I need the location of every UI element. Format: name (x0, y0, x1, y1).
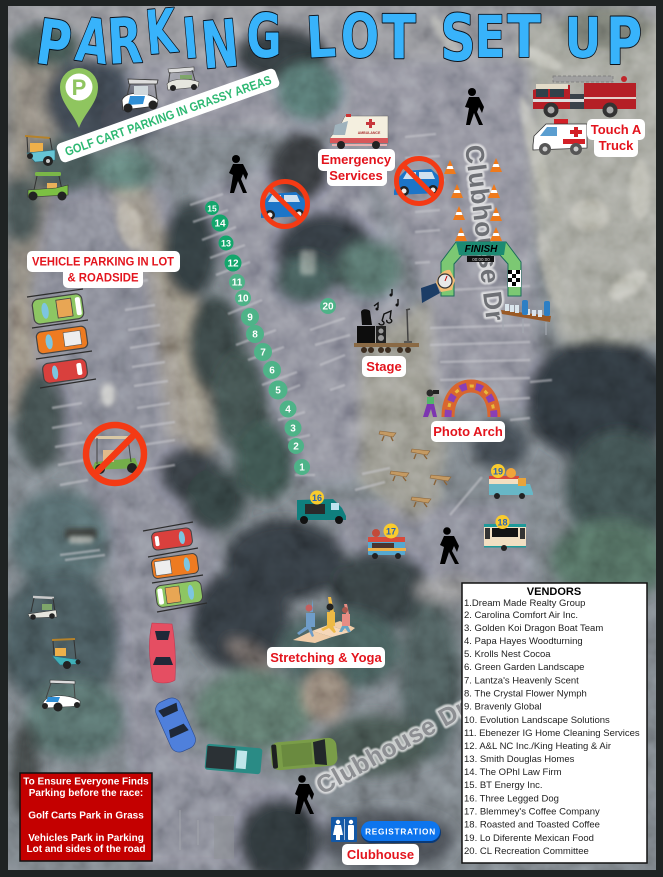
label: Vehicle Parking in lot and roadside (27, 251, 180, 288)
icon: golf cart lower two (52, 639, 80, 669)
road label: Clubhouse Dr curved: Clubhouse Dr (311, 694, 472, 800)
vendors rows: 2. Carolina Comfort Air Inc. (464, 610, 578, 621)
icon: white ambulance truck (533, 119, 587, 155)
icon: ambulance: AMBULANCE (358, 131, 381, 135)
vendors rows: 11. Ebenezer IG Home Cleaning Services (464, 728, 640, 739)
icon: photographer (423, 390, 439, 417)
green car (32, 293, 84, 325)
vendor number markers: 3 (290, 424, 296, 434)
traffic cones (444, 158, 502, 241)
vendor number markers: 1 (299, 462, 305, 474)
vendors rows: 20. CL Recreation Committee (464, 846, 589, 857)
vendors rows: 15. BT Energy Inc. (464, 780, 543, 791)
vendor number markers: 4 (285, 404, 291, 416)
icon: restrooms (331, 817, 357, 842)
label: Clubhouse (342, 844, 419, 865)
big van: green minivan (270, 737, 338, 771)
person two (327, 597, 335, 626)
label: Emergency Services (318, 149, 395, 186)
vendors rows: 18. Roasted and Toasted Coffee (464, 820, 600, 830)
lighter bush highlights (65, 12, 652, 543)
label: Stretching and Yoga: Stretching & Yoga (270, 650, 383, 665)
icon: parking pin: P (72, 75, 86, 100)
label: Clubhouse: Clubhouse (347, 847, 414, 862)
icon: golf cart lower three (42, 680, 80, 712)
food truck 18: 18 (497, 518, 508, 528)
icon: no cars sign one (261, 182, 308, 226)
button: registration: REGISTRATION (365, 828, 436, 836)
vendors rows: 1.Dream Made Realty Group (464, 598, 585, 609)
picnic tables (379, 431, 451, 507)
vendors rows: 8. The Crystal Flower Nymph (464, 688, 587, 700)
label: Touch A Truck (587, 119, 645, 157)
panel: parking notice: Parking before the race: (29, 788, 143, 799)
button: registration (361, 821, 441, 843)
title: P (32, 5, 76, 82)
title: G (246, 2, 282, 72)
label: Vehicle Parking in lot and roadside: & ROADSIDE (68, 270, 138, 284)
vendor number markers: 8 (252, 330, 258, 340)
vendors rows: 13. Smith Douglas Homes (464, 754, 575, 765)
vendors rows: 6. Green Garden Landscape (464, 662, 584, 673)
title: I (180, 5, 201, 72)
vendors rows: 16. Three Legged Dog (464, 794, 559, 804)
red car (42, 358, 88, 384)
orange car (151, 553, 199, 579)
title: L (305, 5, 338, 72)
title: P (606, 3, 642, 80)
vendors heading: VENDORS (527, 586, 581, 598)
icon: pedestrian top (465, 88, 484, 125)
icon: golf cart lower one (28, 597, 57, 620)
icon: parking pin (60, 68, 98, 128)
icon: white and green golf cart (167, 67, 199, 91)
vendors rows: 12. A&L NC Inc./King Heating & Air (464, 741, 611, 752)
icon: white golf cart (122, 79, 158, 112)
panel: parking notice: Vehicles Park in Parking (28, 833, 144, 844)
vendor number markers: 6 (269, 366, 275, 376)
panel: vendors list (462, 583, 647, 863)
title: O (341, 0, 379, 72)
icon: teal golf cart (25, 136, 55, 166)
vendor number markers: 10 (237, 294, 249, 304)
dark trees (9, 23, 81, 67)
vendors rows: 7. Lantza's Heavenly Scent (464, 676, 579, 686)
banner: golf cart parking in grassy areas: GOLF CART PARKING IN GRASSY AREAS (63, 73, 273, 159)
title: T (507, 2, 541, 71)
icon: no golf carts sign (86, 425, 144, 483)
vendor number markers: 15 (207, 204, 217, 214)
vendor number markers: 11 (232, 278, 243, 288)
finish arch: FINISH (465, 244, 498, 255)
vendor number markers: 5 (275, 386, 281, 396)
road label: Clubhouse Dr vertical: Clubhouse Dr (459, 143, 510, 323)
parked cars upper left (27, 289, 96, 388)
label: Stage: Stage (366, 359, 402, 374)
vendor number markers: 9 (247, 312, 253, 324)
vendor number markers: 12 (227, 258, 239, 270)
icon: hand with stopwatch (421, 270, 455, 303)
food truck 17: 17 (386, 526, 396, 536)
icon: pedestrian near food trucks (440, 527, 459, 564)
label: Vehicle Parking in lot and roadside: VEHICLE PARKING IN LOT (32, 254, 175, 268)
icon: pedestrian near lot (229, 155, 248, 193)
green car (155, 580, 203, 608)
vendor number markers: 14 (214, 218, 226, 230)
vendors rows: 4. Papa Hayes Woodturning (464, 636, 583, 647)
red car (151, 527, 193, 551)
music notes (374, 289, 398, 325)
panel: parking notice: Golf Carts Park in Grass (28, 810, 144, 822)
orange car (36, 326, 88, 354)
food truck 17 (368, 524, 406, 559)
vendors rows (464, 598, 640, 857)
title: U (565, 6, 601, 70)
icon: ambulance (330, 114, 388, 149)
label: Touch A Truck: Truck (599, 138, 634, 153)
finish arch: 00:00:00 (472, 257, 490, 262)
label: Stretching and Yoga (267, 647, 385, 668)
person three (342, 604, 350, 626)
title (32, 0, 642, 85)
finish arch (441, 242, 521, 296)
title: A (72, 5, 114, 79)
water table (501, 300, 551, 335)
vendor number markers: 7 (260, 348, 266, 358)
food truck 16: 16 (312, 493, 322, 503)
food truck 19: 19 (493, 466, 503, 476)
road label: Clubhouse Dr curved: Clubhouse Dr (311, 694, 472, 800)
big truck: teal pickup (204, 744, 263, 774)
hatched crosswalk (214, 828, 234, 854)
vendors rows: 3. Golden Koi Dragon Boat Team (464, 623, 603, 634)
label: Photo Arch: Photo Arch (433, 424, 503, 439)
ground tones (0, 0, 663, 60)
food truck 16 (297, 490, 346, 524)
icon: pedestrian near clubhouse road (295, 775, 314, 814)
label: Stage (362, 356, 406, 377)
icon: green golf cart (28, 172, 68, 200)
title: N (198, 6, 242, 85)
label: Emergency Services: Emergency (321, 152, 392, 167)
big car: red sedan (149, 623, 175, 683)
icon: fire truck (533, 76, 636, 118)
title: R (106, 4, 144, 79)
panel: parking notice: To Ensure Everyone Finds (23, 776, 149, 788)
vendors rows: 14. The OPhl Law Firm (464, 767, 562, 778)
parking stall stripes (52, 134, 552, 560)
food truck 18 (484, 515, 526, 551)
stage (354, 289, 419, 353)
title: T (382, 3, 416, 73)
label: Touch A Truck: Touch A (591, 122, 642, 137)
person one (297, 598, 315, 637)
vendors rows: 19. Lo Diferente Mexican Food (464, 833, 594, 844)
road label: Clubhouse Dr vertical: Clubhouse Dr (459, 143, 510, 323)
tan patches (303, 669, 347, 721)
icon: yoga group (293, 597, 355, 643)
vendors rows: 9. Bravenly Global (464, 702, 542, 712)
food truck 19 (489, 464, 533, 499)
photo arch (448, 386, 494, 417)
icon: no cars sign two (394, 158, 442, 204)
label: Emergency Services: Services (329, 168, 383, 183)
title: S (440, 2, 476, 76)
vendor number markers: 13 (221, 238, 231, 248)
vendors rows: 5. Krolls Nest Cocoa (464, 649, 551, 660)
title: E (475, 5, 505, 71)
vendor number markers: 2 (293, 442, 299, 452)
panel: parking notice: Lot and sides of the road (27, 844, 145, 855)
parked cars lower (143, 522, 207, 612)
vendor number markers (205, 201, 336, 475)
panel: parking notice (20, 773, 152, 861)
vendors rows: 10. Evolution Landscape Solutions (464, 715, 610, 726)
big car: blue sedan (153, 695, 198, 755)
vendors rows: 17. Blemmey's Coffee Company (464, 806, 600, 818)
label: Photo Arch (431, 421, 505, 442)
vendor number markers: 20 (322, 302, 334, 312)
